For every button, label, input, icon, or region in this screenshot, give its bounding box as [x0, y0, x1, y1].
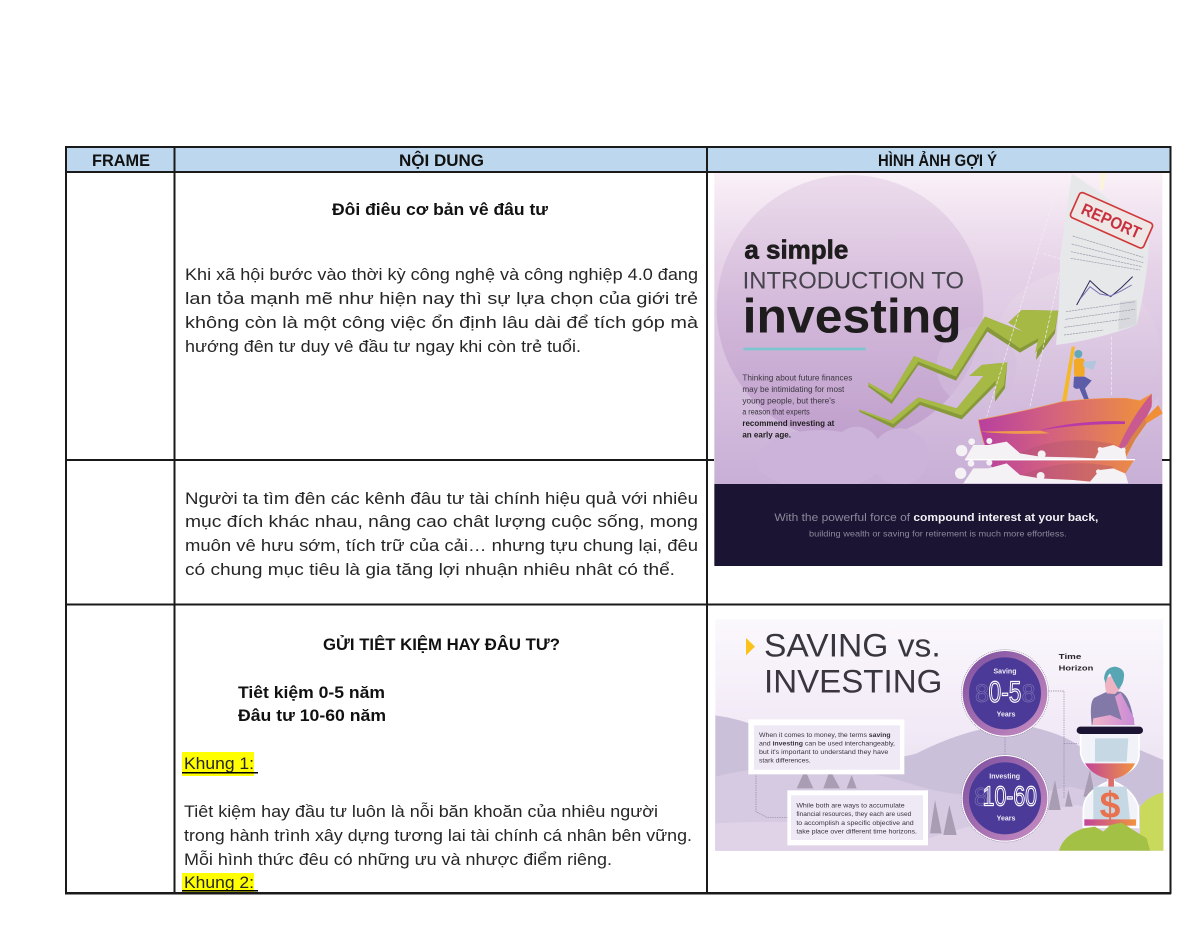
text block: durations: Tiêt kiệm 0-5 năm	[238, 684, 385, 702]
text box 1: and investing can be used interchangeably,	[759, 740, 895, 747]
report stamp: REPORT	[1078, 200, 1144, 243]
figure on the boat	[1073, 350, 1097, 401]
dial: investing 10-60 years: Investing	[989, 773, 1020, 780]
text block: khung 1 paragraph: trong hành trình xây dựng tương lai tài chính cá nhân bên vững.	[184, 827, 692, 845]
dial: saving 0-5 years: Saving	[994, 668, 1016, 675]
bush	[1059, 793, 1163, 851]
dial: investing 10-60 years: Years	[997, 816, 1015, 823]
icon: yellow marker	[746, 638, 755, 655]
dial: investing 10-60 years	[961, 755, 1049, 842]
text block: khung 1 paragraph: Mỗi hình thức đêu có những ưu và nhược điểm riêng.	[184, 850, 612, 869]
dial: saving 0-5 years	[961, 650, 1049, 737]
boat hull	[978, 394, 1163, 483]
dial: saving 0-5 years: 8	[1022, 680, 1036, 708]
intro paragraph: recommend investing at	[742, 419, 835, 428]
text block: row 2 paragraph: có chung mục tiêu là gia tăng lợi nhuận nhiêu nhât có thể.	[185, 561, 675, 579]
header: frame: FRAME	[92, 152, 150, 170]
heading: saving vs: SAVING vs.	[764, 627, 941, 664]
icon: report sail	[1056, 173, 1154, 345]
heading: investing: INVESTING	[764, 662, 942, 699]
header: noi dung: NỘI DUNG	[399, 151, 484, 170]
text block: row 2 paragraph: Người ta tìm đên các kênh đâu tư tài chính hiệu quả với nhiêu	[185, 490, 698, 508]
text box 1: but it's important to understand they have	[759, 749, 889, 756]
heading: gui tiet kiem hay dau tu: GỬI TIÊT KIỆM HAY ĐÂU TƯ?	[323, 635, 560, 654]
icon: green growth arrows	[859, 310, 1058, 428]
text block: row 2 paragraph	[185, 490, 698, 579]
text block: durations: Đâu tư 10-60 năm	[238, 707, 386, 725]
figure thinking	[1091, 667, 1134, 725]
text box 2	[787, 790, 928, 845]
text box 2: to accomplish a specific objective and	[796, 820, 914, 827]
dial: saving 0-5 years: 0-5	[989, 676, 1021, 709]
dial: saving 0-5 years: 8	[975, 680, 989, 708]
panel: intro investing image	[714, 173, 1163, 566]
intro paragraph: may be intimidating for most	[742, 385, 845, 394]
intro paragraph: an early age.	[742, 430, 791, 439]
intro paragraph: Thinking about future finances	[742, 374, 852, 383]
icon: hourglass with dollar sign: $	[1100, 783, 1121, 825]
dotted connectors	[756, 691, 1078, 817]
text block: row 1 paragraph: hướng đên tư duy vê đầu tư ngay khi còn trẻ tuổi.	[185, 338, 581, 356]
mast and rigging	[987, 173, 1112, 417]
heading: doi dieu co ban ve dau tu: Đôi điêu cơ bản vê đâu tư	[332, 201, 548, 219]
waves	[955, 438, 1128, 483]
text block: row 1 paragraph	[185, 266, 699, 356]
label: khung 1	[182, 752, 258, 776]
icon: hourglass with dollar sign	[1077, 727, 1143, 827]
heading: a simple: a simple	[744, 234, 848, 264]
text box 2: financial resources, they each are used	[796, 811, 912, 818]
heading: investing: investing	[743, 289, 962, 343]
text block: row 1 paragraph: Khi xã hội bước vào thời kỳ công nghệ và công nghiệp 4.0 đang	[185, 266, 698, 284]
table header band	[66, 147, 1170, 172]
label: khung 1: Khung 1:	[184, 755, 254, 773]
text box 1	[748, 719, 904, 774]
text block: khung 1 paragraph: Tiêt kiệm hay đầu tư luôn là nỗi băn khoăn của nhiêu người	[184, 802, 658, 821]
intro paragraph: young people, but there's	[742, 396, 835, 405]
panel: intro investing image: building wealth or saving for retirement is much more effortless.	[809, 529, 1067, 539]
text box 1: When it comes to money, the terms saving	[759, 732, 891, 739]
intro paragraph: a reason that experts	[742, 408, 810, 417]
header: hinh anh goi y: HÌNH ẢNH GỢI Ý	[878, 151, 997, 170]
label: khung 2: Khung 2:	[184, 874, 254, 892]
intro paragraph	[742, 374, 852, 439]
text block: row 2 paragraph: mục đích khác nhau, nâng cao chât lượng cuộc sống, mong	[185, 513, 698, 531]
text box 2: While both are ways to accumulate	[796, 802, 905, 809]
caption text: With the powerful force of compound interest at your back,	[774, 512, 1098, 524]
heading: introduction to: INTRODUCTION TO	[743, 267, 964, 294]
dial: investing 10-60 years: 8	[974, 783, 988, 811]
text box 1: stark differences.	[759, 758, 811, 765]
label: time horizon: Time	[1059, 652, 1081, 661]
text box 2: take place over different time horizons.	[796, 829, 917, 836]
text block: row 1 paragraph: không còn là một công việc ổn định lâu dài để tích góp mà	[185, 314, 699, 332]
dial: saving 0-5 years: Years	[997, 711, 1015, 718]
text block: row 2 paragraph: muôn vê hưu sớm, tích trữ của cải… nhưng tựu chung lại, đêu	[185, 537, 698, 555]
mountains	[715, 715, 1163, 851]
dark caption band	[714, 484, 1162, 566]
report stamp	[1069, 192, 1154, 249]
dial: investing 10-60 years: 10-60	[983, 780, 1037, 811]
label: time horizon	[1059, 652, 1094, 672]
panel: saving vs investing image	[715, 627, 1164, 851]
text block: durations	[238, 684, 386, 725]
text block: khung 1 paragraph	[184, 802, 692, 869]
text block: row 1 paragraph: lan tỏa mạnh mẽ như hiện nay thì sự lựa chọn của giới trẻ	[185, 290, 698, 308]
label: time horizon: Horizon	[1059, 663, 1094, 672]
table grid	[65, 146, 1172, 894]
